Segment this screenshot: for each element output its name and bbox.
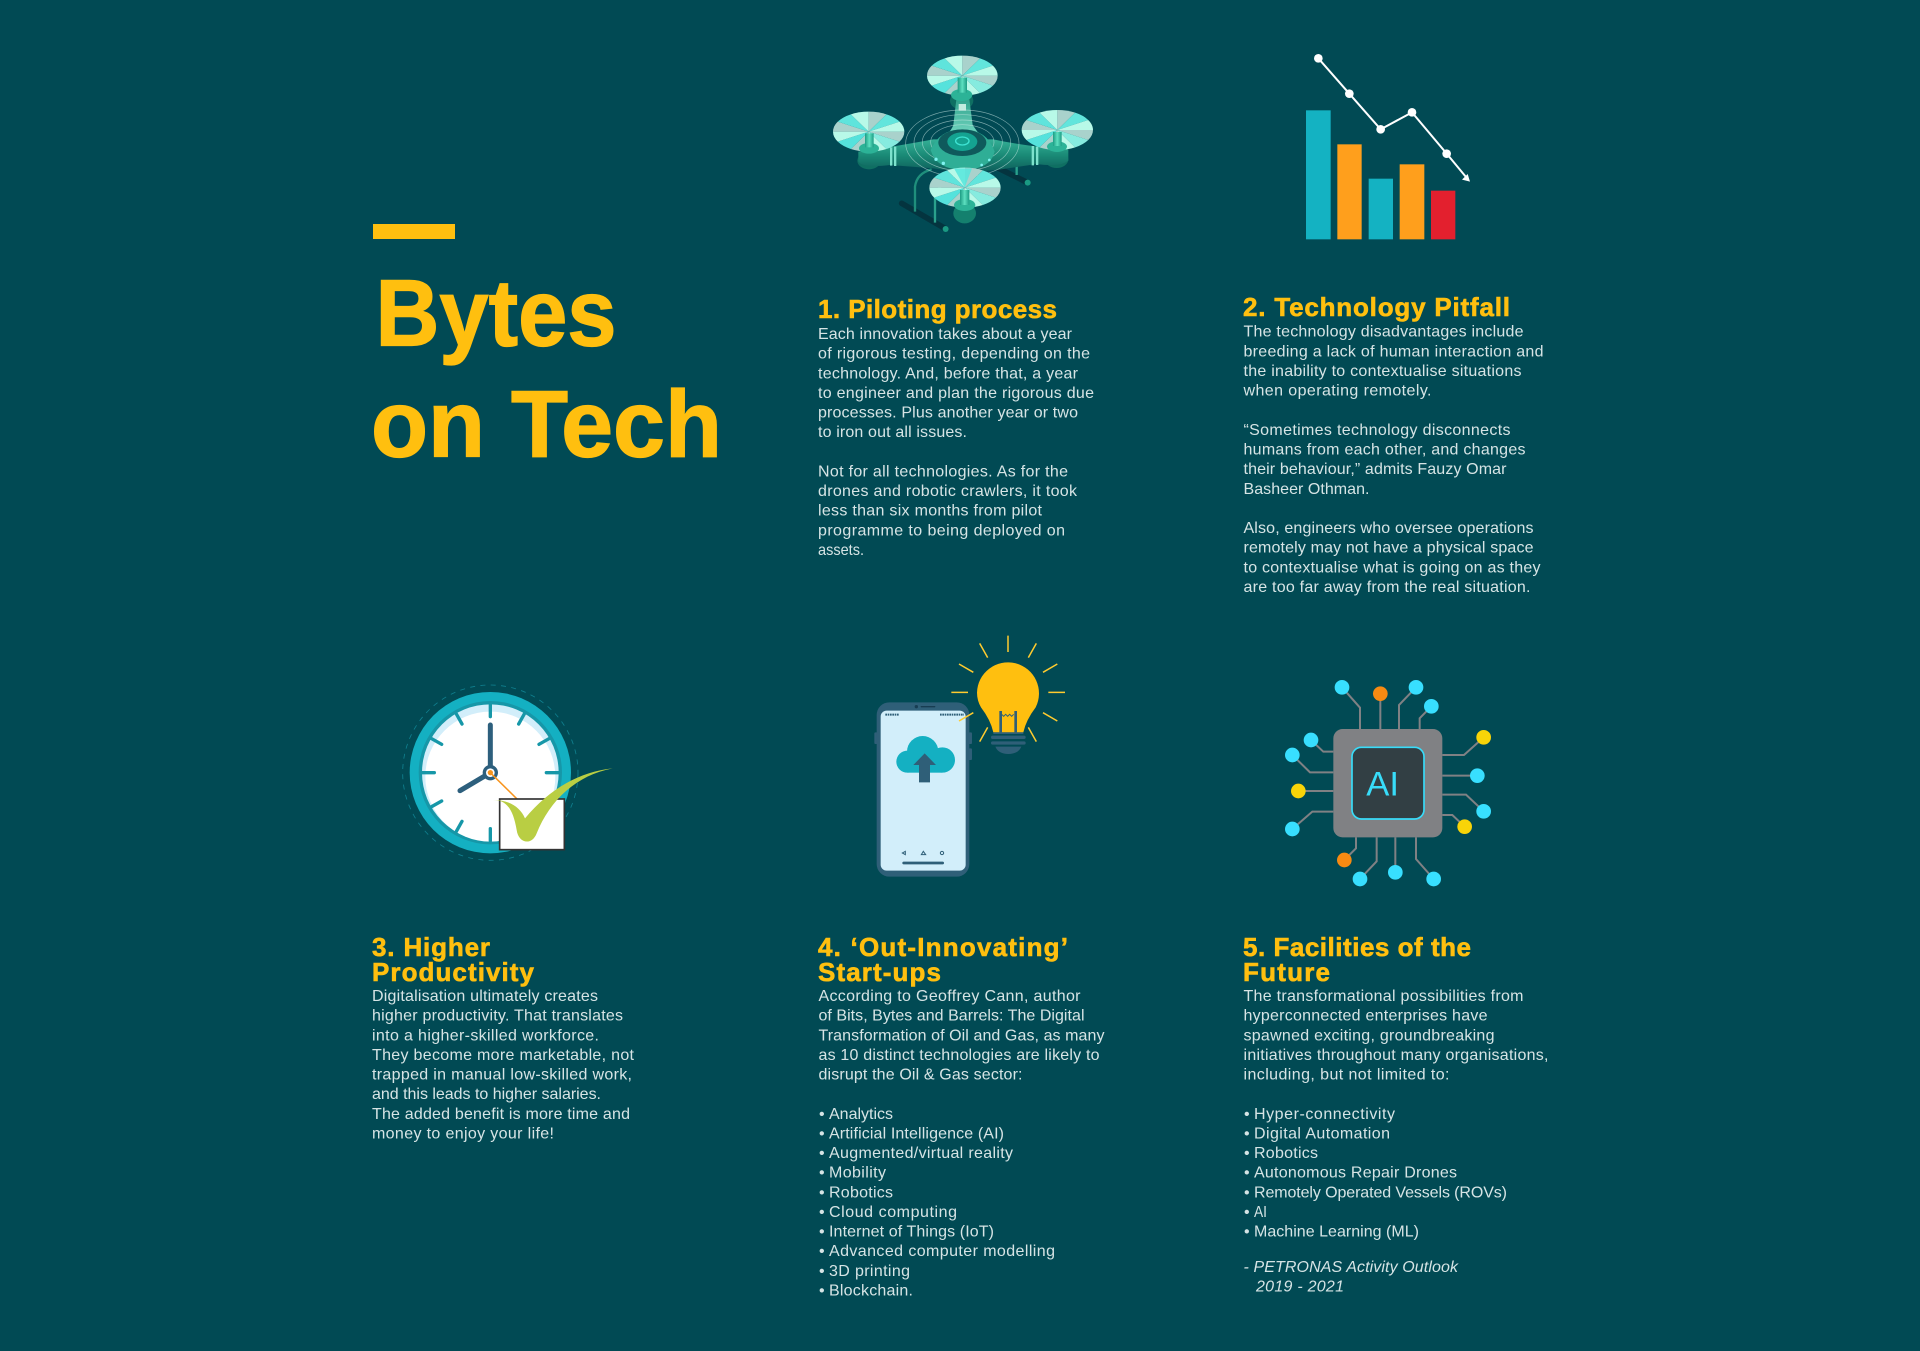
text block: piloting process: Not for all technologies. As for the: [818, 463, 1068, 480]
icon: phone with cloud and light bulb: [874, 636, 1065, 877]
bullet list: initiatives: AI: [1254, 1204, 1267, 1221]
text block: piloting process: Each innovation takes about a year: [818, 326, 1073, 343]
bullet list: technologies: Internet of Things (IoT): [829, 1224, 994, 1241]
bullet list: initiatives: [1244, 1106, 1507, 1241]
text block: technology pitfall: The technology disadvantages include: [1244, 324, 1524, 341]
icon: AI chip: AI: [1366, 766, 1399, 804]
text block: technology pitfall: remotely may not have a physical space: [1244, 540, 1534, 557]
text block: higher productivity: trapped in manual low-skilled work,: [372, 1066, 632, 1084]
bullet list: initiatives: Machine Learning (ML): [1254, 1224, 1419, 1241]
bullet list: technologies: •: [819, 1145, 825, 1162]
bullet list: initiatives: •: [1244, 1204, 1250, 1221]
text block: piloting process: drones and robotic crawlers, it took: [818, 483, 1078, 500]
bullet list: technologies: Advanced computer modelling: [829, 1243, 1055, 1260]
bullet list: technologies: •: [819, 1204, 825, 1221]
text block: facilities intro: initiatives throughout many organisations,: [1244, 1047, 1548, 1064]
bullet list: technologies: Cloud computing: [829, 1204, 957, 1221]
text block: facilities intro: hyperconnected enterprises have: [1244, 1008, 1488, 1025]
icon: falling bar chart: [1306, 54, 1470, 239]
heading: technology pitfall: 2. Technology Pitfall: [1243, 292, 1510, 322]
text block: technology pitfall: [1242, 324, 1544, 596]
heading: out-innovating start-ups: 4. ‘Out-Innovating’: [818, 932, 1068, 962]
heading: higher productivity: Productivity: [372, 957, 535, 987]
bullet list: technologies: •: [819, 1184, 825, 1201]
heading: out-innovating start-ups: Start-ups: [818, 957, 941, 987]
text block: technology pitfall: their behaviour,” admits Fauzy Omar: [1244, 461, 1507, 478]
bullet list: initiatives: •: [1244, 1224, 1250, 1241]
bullet list: initiatives: Robotics: [1254, 1145, 1318, 1162]
text block: higher productivity: and this leads to higher salaries.: [372, 1086, 601, 1103]
bullet list: technologies: •: [819, 1224, 825, 1241]
panel: out-innovating start-ups: [818, 932, 1104, 1300]
text block: technology pitfall: are too far away from the real situation.: [1244, 579, 1530, 596]
text block: piloting process: programme to being deployed on: [818, 522, 1065, 539]
bullet list: technologies: •: [819, 1106, 825, 1123]
heading: out-innovating start-ups: [818, 932, 1068, 987]
heading: facilities of the future: [1243, 932, 1471, 987]
attribution: 2019 - 2021: [1255, 1279, 1344, 1296]
bullet list: technologies: Augmented/virtual reality: [829, 1145, 1013, 1162]
panel: facilities of the future: [1243, 932, 1548, 1296]
bullet list: initiatives: •: [1244, 1165, 1250, 1182]
text block: higher productivity: The added benefit is more time and: [372, 1106, 630, 1123]
heading: piloting process: 1. Piloting process: [818, 294, 1057, 324]
title: Bytes: [376, 261, 616, 367]
panel: higher productivity: [372, 932, 635, 1142]
bullet list: initiatives: Digital Automation: [1254, 1125, 1390, 1142]
icon: drone: [833, 56, 1093, 232]
text block: facilities intro: spawned exciting, groundbreaking: [1244, 1027, 1494, 1044]
text block: piloting process: of rigorous testing, depending on the: [818, 346, 1090, 363]
text block: facilities intro: The transformational possibilities from: [1244, 988, 1524, 1005]
text block: higher productivity: higher productivity. That translates: [372, 1008, 623, 1025]
heading: higher productivity: 3. Higher: [372, 932, 490, 962]
text block: higher productivity: into a higher-skilled workforce.: [372, 1027, 599, 1044]
text block: technology pitfall: Basheer Othman.: [1244, 481, 1370, 498]
text block: higher productivity: Digitalisation ultimately creates: [372, 988, 598, 1005]
bullet list: technologies: Artificial Intelligence (AI): [829, 1125, 1004, 1142]
text block: out-innovating intro: disrupt the Oil & Gas sector:: [818, 1066, 1022, 1084]
bullet list: technologies: •: [819, 1263, 825, 1280]
bullet list: technologies: Blockchain.: [829, 1282, 913, 1300]
bullet list: technologies: •: [819, 1282, 825, 1300]
bullet list: initiatives: •: [1244, 1184, 1250, 1201]
panel: technology pitfall: [1242, 292, 1544, 596]
text block: technology pitfall: breeding a lack of human interaction and: [1244, 343, 1544, 360]
text block: higher productivity: They become more marketable, not: [372, 1047, 635, 1064]
text block: technology pitfall: to contextualise what is going on as they: [1244, 559, 1540, 576]
bullet list: technologies: •: [819, 1243, 825, 1260]
bullet list: initiatives: Remotely Operated Vessels (ROVs): [1254, 1184, 1507, 1201]
bullet list: initiatives: •: [1244, 1145, 1250, 1162]
bullet list: technologies: 3D printing: [829, 1263, 910, 1280]
text block: piloting process: processes. Plus another year or two: [818, 404, 1078, 422]
text block: technology pitfall: when operating remotely.: [1242, 383, 1432, 400]
text block: out-innovating intro: as 10 distinct technologies are likely to: [818, 1047, 1100, 1064]
bullet list: technologies: •: [819, 1165, 825, 1182]
text block: piloting process: [818, 326, 1094, 559]
bullet list: initiatives: Autonomous Repair Drones: [1254, 1165, 1457, 1182]
text block: piloting process: assets.: [818, 542, 864, 559]
text block: piloting process: to engineer and plan the rigorous due: [818, 385, 1094, 402]
title: [371, 261, 722, 478]
bullet list: technologies: Mobility: [829, 1165, 886, 1182]
bullet list: initiatives: Hyper-connectivity: [1254, 1106, 1395, 1123]
bullet list: technologies: Robotics: [829, 1184, 893, 1201]
text block: higher productivity: money to enjoy your life!: [372, 1125, 554, 1142]
bullet list: initiatives: •: [1244, 1106, 1250, 1123]
icon: clock with check mark: [403, 685, 613, 860]
bullet list: technologies: [819, 1106, 1055, 1300]
text block: technology pitfall: “Sometimes technology disconnects: [1244, 422, 1510, 439]
text block: out-innovating intro: Transformation of Oil and Gas, as many: [818, 1027, 1104, 1044]
icon: AI chip: [1285, 680, 1491, 886]
title block: [371, 224, 722, 478]
panel: piloting process: [818, 294, 1094, 559]
text block: technology pitfall: Also, engineers who oversee operations: [1244, 520, 1534, 537]
bullet list: technologies: •: [819, 1125, 825, 1142]
attribution: [1244, 1259, 1459, 1296]
text block: facilities intro: including, but not limited to:: [1244, 1066, 1450, 1084]
text block: out-innovating intro: [818, 988, 1104, 1084]
bullet list: initiatives: •: [1244, 1125, 1250, 1142]
heading: facilities of the future: Future: [1243, 957, 1330, 987]
text block: facilities intro: [1244, 988, 1548, 1084]
heading: facilities of the future: 5. Facilities of the: [1243, 932, 1471, 962]
text block: higher productivity: [372, 988, 635, 1142]
text block: out-innovating intro: of Bits, Bytes and Barrels: The Digital: [818, 1008, 1084, 1025]
attribution: - PETRONAS Activity Outlook: [1244, 1259, 1459, 1276]
bullet list: technologies: Analytics: [829, 1106, 893, 1123]
text block: piloting process: to iron out all issues.: [818, 424, 967, 441]
text block: technology pitfall: the inability to contextualise situations: [1244, 363, 1522, 380]
text block: piloting process: less than six months from pilot: [818, 503, 1043, 520]
title: on Tech: [371, 372, 722, 478]
heading: higher productivity: [372, 932, 535, 987]
text block: out-innovating intro: According to Geoffrey Cann, author: [818, 988, 1081, 1005]
text block: piloting process: technology. And, before that, a year: [818, 365, 1079, 382]
text block: technology pitfall: humans from each other, and changes: [1244, 442, 1526, 458]
